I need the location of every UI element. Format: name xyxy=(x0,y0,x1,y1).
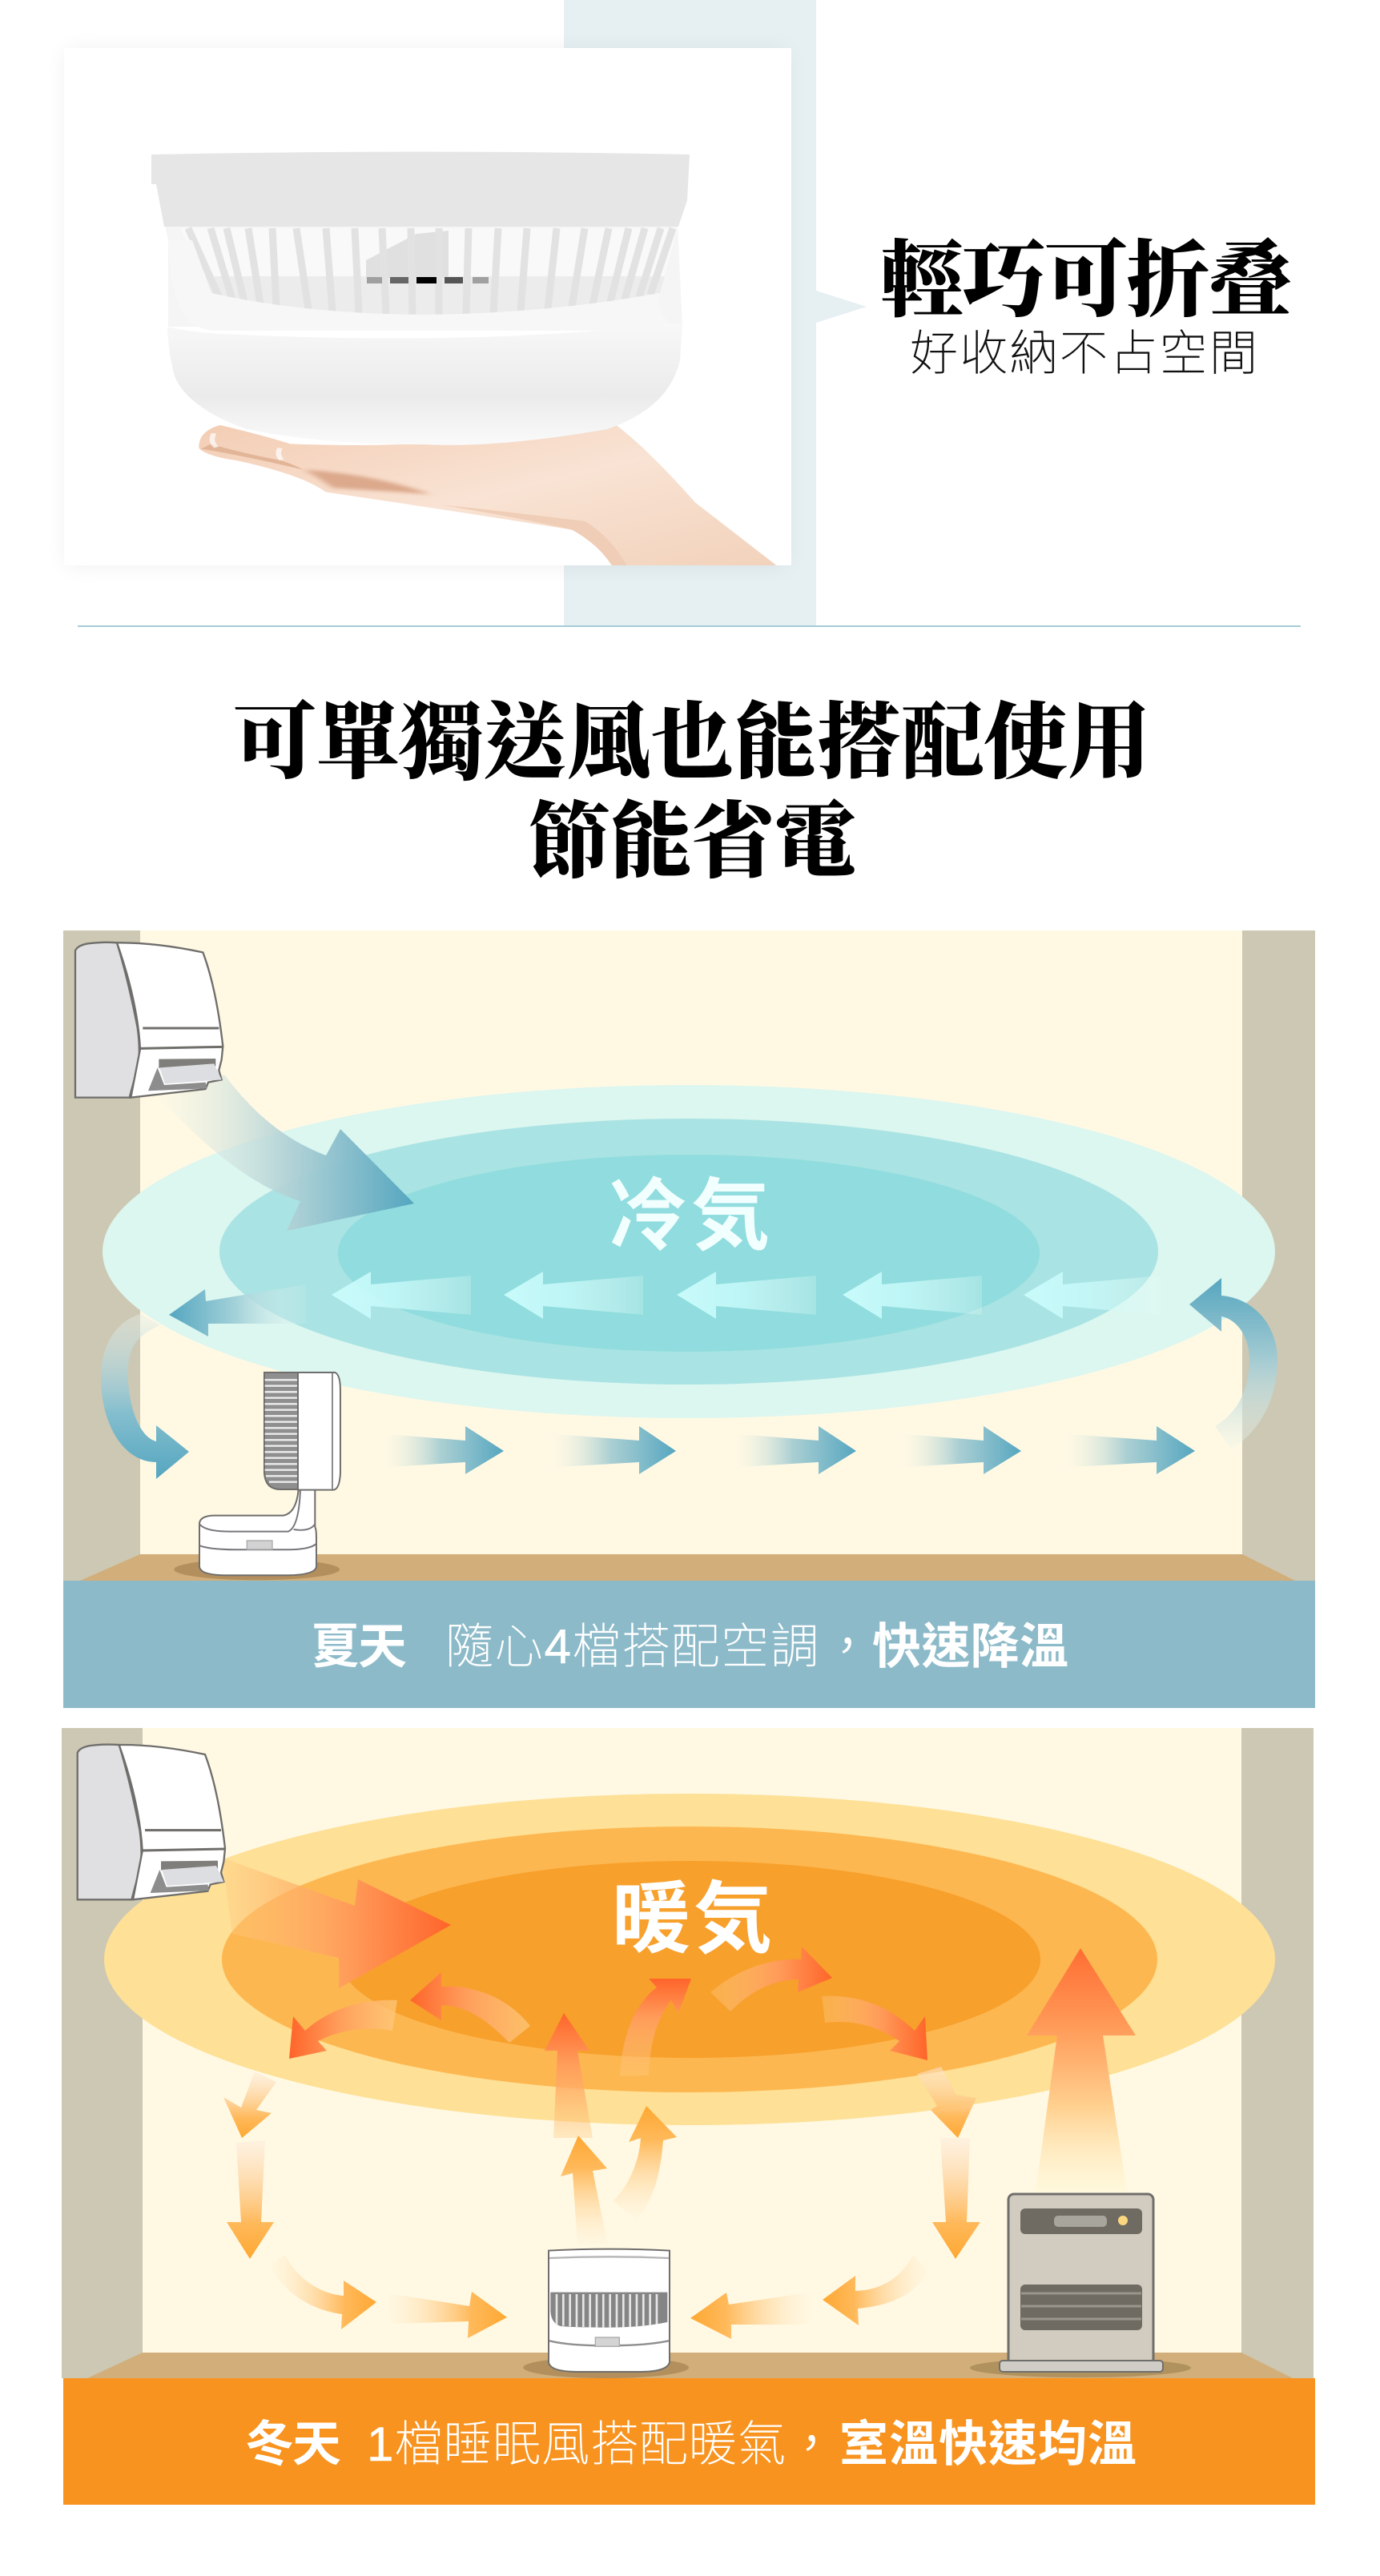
fan slats xyxy=(188,228,673,315)
caption text xyxy=(311,1619,1068,1674)
icon: air conditioner xyxy=(78,1745,225,1899)
caption: description: 1檔睡眠風搭配暖氣 xyxy=(367,2417,786,2471)
caption: season: 夏天 xyxy=(311,1619,407,1674)
caption bar xyxy=(63,1581,1315,1708)
icon: fan, extended xyxy=(174,1372,340,1580)
fan top cap xyxy=(151,152,690,227)
feature subtitle: 好收納不占空間 xyxy=(910,327,1257,380)
heading line 2: 節能省電 xyxy=(528,797,856,889)
fan display slots xyxy=(367,277,489,283)
room wall back xyxy=(63,930,1315,1581)
caption: comma: ， xyxy=(823,1620,871,1674)
caption bar xyxy=(63,2378,1315,2505)
arrows: ceiling flow left xyxy=(332,1272,1161,1319)
room wall back xyxy=(62,1728,1314,2378)
floor xyxy=(87,2353,1293,2378)
cool air zones xyxy=(103,1085,1275,1418)
fan grille xyxy=(180,228,678,315)
arrow: from air conditioner xyxy=(222,1858,451,1988)
panel: winter room diagram xyxy=(62,1728,1315,2505)
caption: description: 隨心4檔搭配空調 xyxy=(445,1620,819,1674)
arrow: right wall up xyxy=(1189,1278,1277,1449)
fan inner floor xyxy=(204,276,665,315)
caption: comma: ， xyxy=(787,2417,835,2471)
label: cold air: 冷気 xyxy=(608,1171,770,1260)
photo: fan held on a hand xyxy=(151,152,776,565)
hand xyxy=(199,425,776,565)
arrow: left wall down xyxy=(101,1314,189,1479)
caption text xyxy=(245,2417,1137,2471)
product photo card xyxy=(64,48,791,565)
heading line 1: 可單獨送風也能搭配使用 xyxy=(233,697,1151,790)
fan base bowl xyxy=(167,323,682,445)
pointer triangle xyxy=(816,291,867,323)
feature title: 輕巧可折叠 xyxy=(880,235,1292,328)
main heading xyxy=(233,697,1151,889)
arrow: to left wall xyxy=(169,1284,307,1336)
icon: air conditioner xyxy=(75,942,223,1098)
fan rear body xyxy=(156,184,682,327)
panel: foldable product section xyxy=(64,0,1292,626)
icon: kerosene heater xyxy=(970,2194,1191,2377)
arrow: from air conditioner xyxy=(160,1075,414,1231)
arrows: floor flow right xyxy=(377,1426,1195,1474)
teal backing band xyxy=(564,0,816,626)
panel: summer room diagram xyxy=(63,930,1315,1708)
arrows: right wall circulation xyxy=(690,2067,980,2339)
arrows: left wall circulation xyxy=(223,2072,507,2338)
room interior xyxy=(143,1728,1241,2353)
arrows: ceiling circulation xyxy=(289,1947,927,2138)
arrows: rising from fan xyxy=(561,2106,677,2245)
room interior xyxy=(140,930,1242,1555)
fan hub xyxy=(366,231,449,278)
caption: emphasis: 快速降溫 xyxy=(872,1619,1068,1674)
floor xyxy=(80,1554,1295,1581)
icon: compact fan, folded xyxy=(523,2249,689,2378)
fan neck collar xyxy=(168,240,682,331)
label: warm air: 暖気 xyxy=(612,1875,772,1963)
warm air zones xyxy=(104,1794,1275,2125)
product photo card shadow xyxy=(66,50,787,566)
arrow: rising from heater xyxy=(1027,1948,1136,2192)
caption: season: 冬天 xyxy=(245,2417,341,2471)
caption: emphasis: 室溫快速均溫 xyxy=(839,2417,1137,2471)
